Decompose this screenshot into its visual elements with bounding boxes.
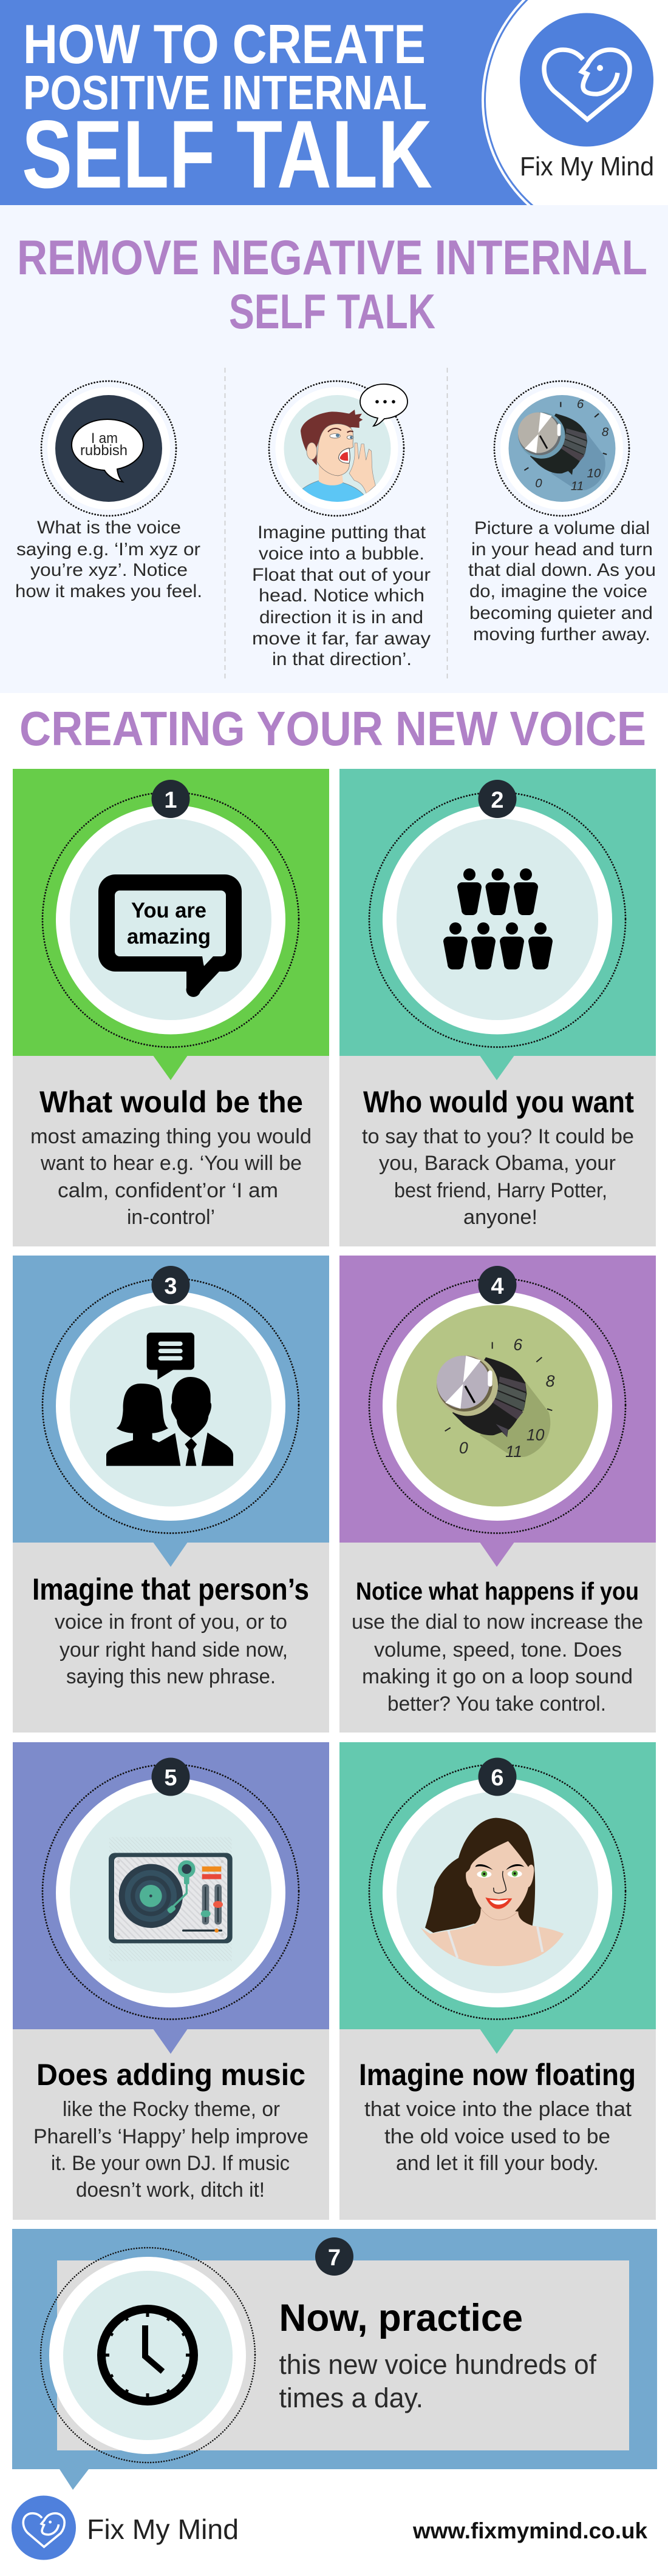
- clock circle: [41, 2248, 255, 2463]
- icon: I am rubbish bubble: rubbish: [80, 442, 128, 459]
- icon: shouting man: [269, 381, 407, 516]
- icon: large volume dial: 10: [527, 1425, 545, 1444]
- footer: [12, 2495, 647, 2560]
- panel 1 text: calm, confident’or ‘I am: [58, 1179, 278, 1202]
- panel 5 text: doesn’t work, ditch it!: [76, 2179, 265, 2202]
- icon: woman portrait: [421, 1818, 564, 1966]
- panel 2 text: best friend, Harry Potter,: [394, 1179, 607, 1202]
- text: what is the voice: saying e.g. ‘I’m xyz or: [16, 539, 200, 559]
- icon: large volume dial: 6: [513, 1336, 522, 1354]
- panel 2: [339, 769, 656, 1246]
- text: imagine putting that: Float that out of your: [252, 565, 431, 585]
- panel 5 text: [33, 2058, 308, 2202]
- icon: large volume dial: 8: [546, 1372, 555, 1390]
- panel 4 text: better? You take control.: [387, 1692, 606, 1716]
- main title: SELF TALK: [22, 100, 432, 208]
- panel 3 text: Imagine that person’s: [32, 1572, 309, 1606]
- panel 5 text: Pharell’s ‘Happy’ help improve: [33, 2125, 308, 2148]
- panel 1 text: want to hear e.g. ‘You will be: [40, 1152, 302, 1175]
- panel 3: [13, 1256, 329, 1733]
- panel 1 text: in-control’: [127, 1206, 215, 1229]
- section heading: SELF TALK: [229, 285, 435, 339]
- text: picture a volume dial: Picture a volume dial: [474, 518, 650, 538]
- badge 6: 6: [491, 1765, 504, 1791]
- icon: small volume dial: 0: [535, 476, 542, 490]
- panel 1 text: What would be the: [39, 1085, 303, 1119]
- badge 7: 7: [328, 2245, 341, 2271]
- text: imagine putting that: in that direction’.: [272, 649, 412, 669]
- badge 4: 4: [491, 1274, 504, 1299]
- panel 5: [13, 1742, 329, 2220]
- panel 6 text: the old voice used to be: [384, 2125, 610, 2148]
- icon: I am rubbish bubble: [41, 381, 176, 516]
- section: remove negative self talk: [0, 205, 668, 693]
- panel 4 text: [352, 1577, 643, 1716]
- icon: you are amazing bubble: amazing: [127, 925, 211, 948]
- panel 7: [12, 2229, 657, 2490]
- badge 4: [479, 1266, 516, 1304]
- text: imagine putting that: Imagine putting that: [257, 522, 426, 543]
- panel 2 text: Who would you want: [363, 1085, 634, 1119]
- panel 7 text: Now, practice: [279, 2297, 523, 2339]
- icon: small volume dial: [494, 381, 629, 516]
- badge 1: 1: [164, 788, 177, 813]
- text: picture a volume dial: that dial down. As you: [468, 560, 656, 580]
- text: what is the voice: What is the voice: [37, 518, 181, 538]
- icon: group of people: [443, 868, 553, 970]
- footer wordmark: Fix My Mind: [87, 2513, 239, 2545]
- panel 7 text: this new voice hundreds of: [279, 2349, 596, 2380]
- header banner: [0, 0, 653, 205]
- badge 3: [152, 1266, 189, 1304]
- badge 6: [479, 1757, 516, 1796]
- panel 3 text: your right hand side now,: [60, 1638, 288, 1662]
- panel 3 text: saying this new phrase.: [66, 1665, 276, 1688]
- logo: heart in circle: [520, 13, 653, 147]
- panel 5 text: like the Rocky theme, or: [63, 2098, 280, 2121]
- icon: turntable: [109, 1837, 233, 1961]
- badge 1: [152, 780, 189, 818]
- badge 7: [315, 2237, 353, 2276]
- text: picture a volume dial: [468, 518, 656, 644]
- text: what is the voice: [15, 518, 202, 601]
- panel 2 text: anyone!: [463, 1206, 537, 1229]
- icon: I am rubbish bubble: I am: [91, 430, 118, 447]
- panel 2 text: [362, 1085, 634, 1229]
- icon: large volume dial: 11: [505, 1442, 522, 1461]
- text: imagine putting that: move it far, far away: [252, 629, 431, 649]
- badge 5: [152, 1757, 189, 1796]
- icon: two people talking: [106, 1333, 233, 1466]
- panel 4: [339, 1256, 656, 1733]
- main title: [22, 14, 432, 208]
- icon: small volume dial: 11: [571, 479, 584, 493]
- main title: HOW TO CREATE: [23, 14, 426, 75]
- icon: you are amazing bubble: [98, 874, 242, 997]
- text: picture a volume dial: moving further away.: [473, 624, 650, 644]
- panel 1 text: most amazing thing you would: [30, 1125, 312, 1148]
- panel 4 text: volume, speed, tone. Does: [374, 1638, 622, 1662]
- footer logo: [12, 2495, 76, 2560]
- icon: you are amazing bubble: You are: [131, 899, 206, 922]
- icon: large volume dial: 0: [459, 1439, 468, 1457]
- website: www.fixmymind.co.uk: [412, 2518, 647, 2543]
- text: picture a volume dial: becoming quieter and: [469, 603, 653, 623]
- panel 2 text: to say that to you? It could be: [362, 1125, 634, 1148]
- badge 2: [479, 780, 516, 818]
- panel 2 text: you, Barack Obama, your: [379, 1152, 616, 1175]
- panel 4 text: making it go on a loop sound: [362, 1665, 633, 1688]
- section heading: [17, 231, 647, 339]
- text: imagine putting that: direction it is in and: [259, 607, 423, 627]
- panel 7 text: [279, 2297, 596, 2413]
- panel 5 text: it. Be your own DJ. If music: [51, 2152, 290, 2175]
- icon: small volume dial: 8: [602, 425, 609, 439]
- text: what is the voice: you’re xyz’. Notice: [30, 560, 188, 580]
- text: what is the voice: how it makes you feel.: [15, 581, 202, 601]
- panel 6 text: Imagine now floating: [359, 2058, 636, 2092]
- text: imagine putting that: [252, 522, 431, 669]
- panel 4 text: use the dial to now increase the: [352, 1611, 643, 1634]
- text: picture a volume dial: in your head and turn: [471, 539, 653, 559]
- badge 2: 2: [491, 788, 504, 813]
- panel 6 text: and let it fill your body.: [396, 2152, 599, 2175]
- logo wordmark: Fix My Mind: [520, 152, 654, 181]
- panel 3 text: voice in front of you, or to: [55, 1611, 287, 1634]
- badge 5: 5: [164, 1765, 177, 1791]
- panel 5 text: Does adding music: [36, 2058, 305, 2092]
- panel 6 text: [359, 2058, 636, 2175]
- panel 1 text: [30, 1085, 312, 1229]
- icon: small volume dial: 10: [587, 467, 601, 481]
- text: imagine putting that: voice into a bubble.: [259, 544, 424, 564]
- badge 3: 3: [164, 1274, 177, 1299]
- panel 6 text: that voice into the place that: [364, 2098, 632, 2121]
- icon: clock: [101, 2309, 194, 2401]
- text: imagine putting that: head. Notice which: [259, 586, 424, 606]
- panel 3 text: [32, 1572, 309, 1688]
- icon: small volume dial: 6: [577, 397, 584, 411]
- text: picture a volume dial: do, imagine the voice: [469, 581, 647, 601]
- main title: POSITIVE INTERNAL: [23, 66, 427, 120]
- panel 1: [13, 769, 329, 1246]
- panel 7 text: times a day.: [279, 2382, 423, 2413]
- icon: large volume dial: [437, 1336, 555, 1461]
- panel 6: [339, 1742, 656, 2220]
